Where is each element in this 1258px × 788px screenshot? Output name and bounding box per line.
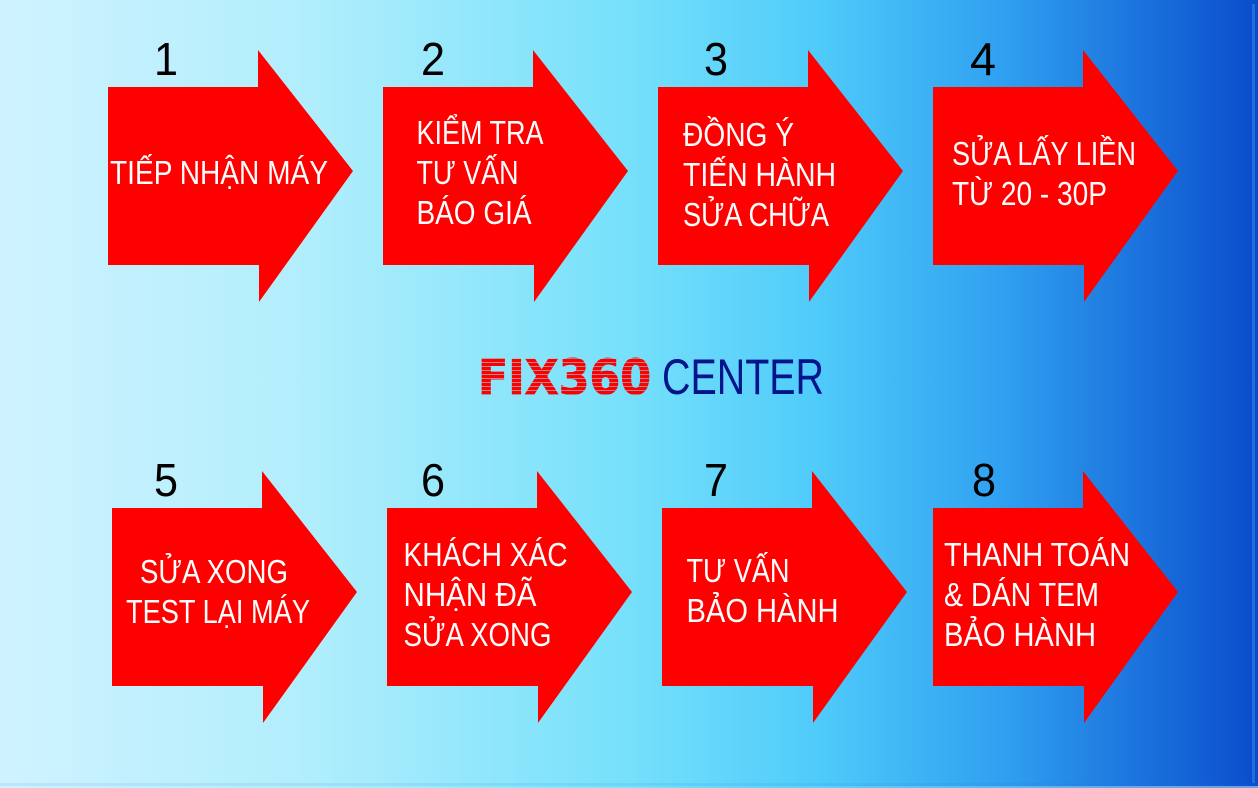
step 8: THANH TOÁN [944, 536, 1130, 573]
step 1: 1 [154, 33, 178, 85]
step 4 [933, 33, 1178, 302]
step 6: KHÁCH XÁC [404, 536, 568, 573]
step 1: TIẾP NHẬN MÁY [110, 154, 328, 191]
step 5 [112, 454, 357, 723]
step 5: 5 [154, 454, 178, 506]
step 3: 3 [704, 33, 728, 85]
step 1 [108, 33, 353, 302]
logo: FIX360 CENTER: FIX360 [478, 350, 651, 406]
step 7: 7 [704, 454, 728, 506]
step 8: & DÁN TEM [944, 576, 1099, 613]
step 2: BÁO GIÁ [416, 194, 532, 231]
logo: FIX360 CENTER [478, 349, 824, 406]
step 3: ĐỒNG Ý [683, 116, 794, 153]
step 5: SỬA XONG [140, 553, 288, 590]
step 3: SỬA CHỮA [683, 196, 829, 233]
step 7 [662, 454, 907, 723]
step 2: 2 [421, 33, 445, 85]
step 3 [658, 33, 903, 302]
step 2: KIỂM TRA [416, 114, 544, 151]
step 6: 6 [421, 454, 445, 506]
step 6 [387, 454, 632, 723]
step 8: BẢO HÀNH [944, 616, 1096, 653]
step 8 [933, 454, 1178, 723]
step 6: SỬA XONG [404, 616, 552, 653]
step 8: 8 [972, 454, 996, 506]
step 2: TƯ VẤN [416, 154, 518, 191]
step 4: TỪ 20 - 30P [952, 175, 1107, 212]
step 4: 4 [970, 33, 996, 85]
step 3: TIẾN HÀNH [683, 156, 836, 193]
step 5: TEST LẠI MÁY [126, 593, 310, 630]
step 6: NHẬN ĐÃ [404, 576, 536, 613]
step 2 [383, 33, 628, 302]
step 7: TƯ VẤN [686, 552, 790, 589]
step 7: BẢO HÀNH [686, 592, 838, 629]
logo: FIX360 CENTER: CENTER [662, 349, 824, 405]
step 4: SỬA LẤY LIỀN [952, 135, 1136, 172]
